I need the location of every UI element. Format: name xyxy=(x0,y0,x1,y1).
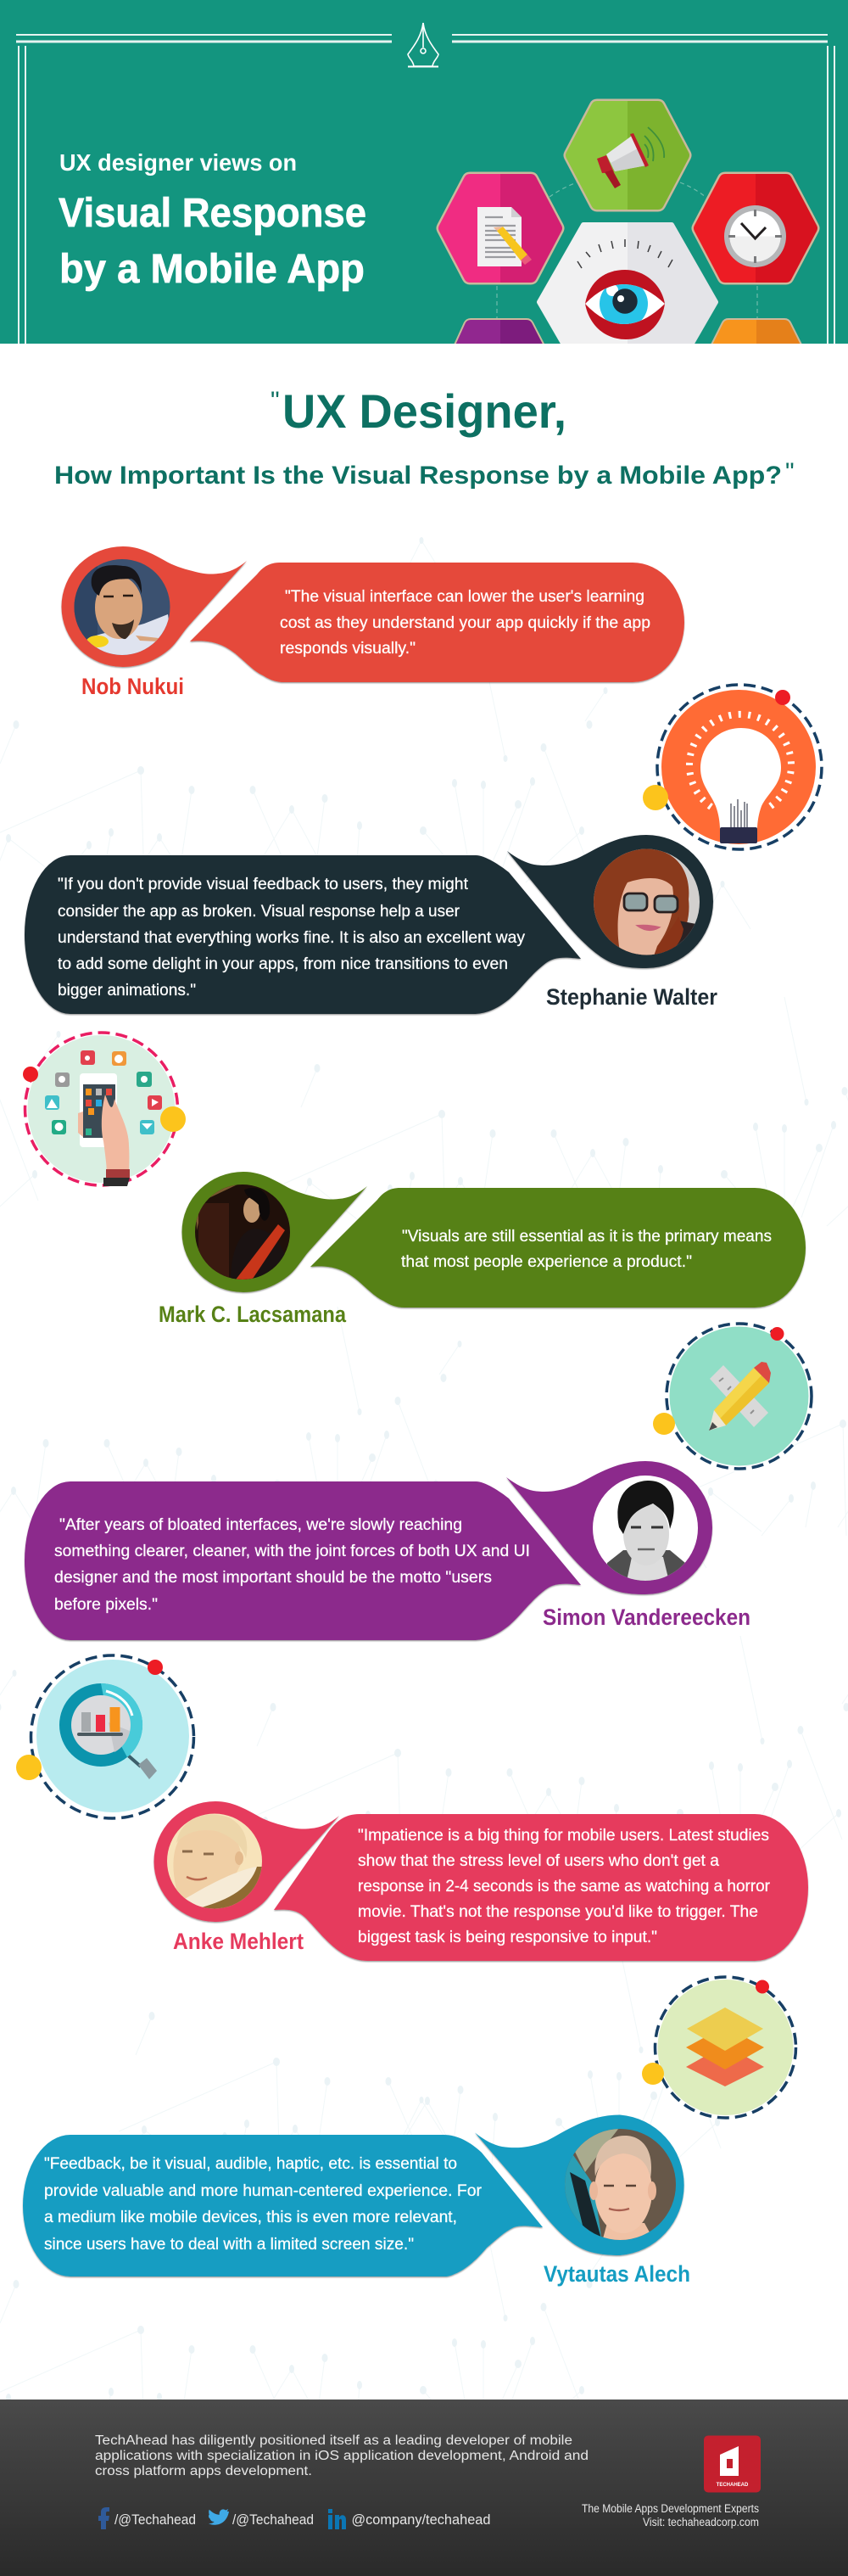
speech bubble: Nob Nukui: responds visually." xyxy=(280,640,416,658)
speech bubble: Stephanie Walter: "If you don't provide visual feedback to users, they might xyxy=(58,876,469,893)
social: linkedin xyxy=(328,2509,490,2529)
avatar: Nob Nukui xyxy=(61,546,247,667)
company description: applications with specialization in iOS application development, Android and xyxy=(95,2449,589,2463)
tagline and website: The Mobile Apps Development Experts xyxy=(582,2502,759,2515)
footer xyxy=(0,2400,848,2576)
speech bubble: Vytautas Alech: "Feedback, be it visual, audible, haptic, etc. is essential to xyxy=(44,2155,457,2173)
speech bubble: Anke Mehlert xyxy=(154,1801,808,1961)
speech bubble: Nob Nukui xyxy=(61,546,684,699)
quote: Nob Nukui xyxy=(190,563,684,682)
speech bubble: Mark C. Lacsamana: that most people experience a product." xyxy=(401,1253,692,1271)
company description xyxy=(95,2433,589,2478)
quote: Anke Mehlert xyxy=(274,1814,808,1961)
name: Simon Vandereecken: Simon Vandereecken xyxy=(543,1604,750,1630)
quote: Stephanie Walter xyxy=(25,855,581,1014)
speech bubble: Simon Vandereecken: before pixels." xyxy=(54,1596,158,1614)
hexagon: megaphone xyxy=(572,107,683,204)
speech bubble: Stephanie Walter: consider the app as broken. Visual response help a user xyxy=(58,903,460,921)
speech bubble: Anke Mehlert: biggest task is being responsive to input." xyxy=(358,1929,657,1946)
speech bubble: Mark C. Lacsamana: "Visuals are still essential as it is the primary means xyxy=(402,1228,772,1246)
social: linkedin: @company/techahead xyxy=(351,2512,490,2528)
hexagon: clock xyxy=(700,180,812,277)
icon: phone with app icons xyxy=(23,1033,186,1186)
speech bubble: Anke Mehlert: response in 2-4 seconds is the same as watching a horror xyxy=(358,1878,771,1896)
speech bubble: Nob Nukui: "The visual interface can lower the user's learning xyxy=(285,588,644,606)
social: facebook xyxy=(98,2507,196,2529)
avatar: Mark C. Lacsamana xyxy=(181,1172,367,1292)
speech bubble: Anke Mehlert: movie. That's not the response you'd like to trigger. The xyxy=(358,1903,758,1921)
hexagon icon cluster xyxy=(444,107,812,382)
speech bubble: Simon Vandereecken xyxy=(25,1461,750,1640)
company description: TechAhead has diligently positioned itself as a leading developer of mobile xyxy=(95,2433,572,2448)
avatar: Simon Vandereecken xyxy=(506,1461,712,1594)
speech bubble: Stephanie Walter: to add some delight in your apps, from nice transitions to even xyxy=(58,955,508,973)
speech bubble: Anke Mehlert: "Impatience is a big thing for mobile users. Latest studies xyxy=(358,1827,769,1845)
speech bubble: Vytautas Alech xyxy=(23,2114,690,2287)
social: facebook: /@Techahead xyxy=(114,2512,196,2528)
avatar: Stephanie Walter xyxy=(507,835,713,968)
speech bubble: Stephanie Walter: understand that everything works fine. It is also an excellent way xyxy=(58,929,525,947)
hexagon: orange partial xyxy=(711,318,802,344)
section heading xyxy=(54,384,795,490)
speech bubble: Mark C. Lacsamana xyxy=(159,1172,806,1327)
icon: light bulb xyxy=(643,685,822,849)
section heading: " xyxy=(785,458,795,486)
speech bubble: Vytautas Alech: since users have to deal with a limited screen size." xyxy=(44,2236,414,2254)
tagline and website: Visit: techaheadcorp.com xyxy=(643,2516,759,2528)
social: twitter: /@Techahead xyxy=(232,2512,314,2528)
heading line 1: " xyxy=(271,387,280,415)
avatar: Vytautas Alech xyxy=(475,2114,684,2255)
header title: Visual Response xyxy=(59,191,366,236)
speech bubble: Stephanie Walter: bigger animations." xyxy=(58,982,196,1000)
speech bubble: Anke Mehlert: show that the stress level of users who don't get a xyxy=(358,1852,719,1870)
company description: cross platform apps development. xyxy=(95,2464,312,2478)
speech bubble: Vytautas Alech: a medium like mobile devices, this is even more relevant, xyxy=(44,2209,457,2226)
speech bubble: Simon Vandereecken: "After years of bloated interfaces, we're slowly reaching xyxy=(59,1516,462,1534)
header title xyxy=(59,191,366,292)
header title: by a Mobile App xyxy=(59,247,365,292)
heading line 2: How Important Is the Visual Response by a Mobile App? xyxy=(54,462,782,490)
logo: TechAhead xyxy=(704,2435,761,2493)
quote: Mark C. Lacsamana xyxy=(310,1188,806,1308)
header banner xyxy=(0,0,848,382)
header kicker: UX designer views on xyxy=(59,149,297,176)
speech bubble: Vytautas Alech: provide valuable and more human-centered experience. For xyxy=(44,2182,483,2200)
icon: pencil and ruler xyxy=(653,1324,812,1469)
background network pattern xyxy=(0,537,848,2450)
hexagon: purple partial xyxy=(455,318,544,344)
name: Anke Mehlert: Anke Mehlert xyxy=(173,1929,304,1954)
name: Stephanie Walter: Stephanie Walter xyxy=(546,984,717,1010)
icon: pen nib xyxy=(408,23,438,66)
icon: stacked layers xyxy=(642,1977,795,2118)
logo: TechAhead: TECHAHEAD xyxy=(717,2483,749,2488)
speech bubble: Simon Vandereecken: something clearer, cleaner, with the joint forces of both UX and UI xyxy=(54,1543,530,1560)
hexagon: document xyxy=(444,180,556,277)
icon: magnifier with chart xyxy=(16,1655,193,1818)
hexagon: eye xyxy=(537,222,718,344)
name: Vytautas Alech: Vytautas Alech xyxy=(544,2261,690,2287)
speech bubble: Simon Vandereecken: designer and the most important should be the motto "users xyxy=(54,1569,492,1587)
section heading: UX Designer, xyxy=(282,384,566,438)
avatar: Anke Mehlert xyxy=(154,1801,339,1922)
quote: Simon Vandereecken xyxy=(25,1481,581,1640)
speech bubble: Stephanie Walter xyxy=(25,835,717,1014)
tagline and website xyxy=(582,2502,759,2528)
social: twitter xyxy=(209,2509,314,2528)
name: Nob Nukui: Nob Nukui xyxy=(81,674,184,699)
quote: Vytautas Alech xyxy=(23,2135,543,2276)
name: Mark C. Lacsamana: Mark C. Lacsamana xyxy=(159,1302,347,1327)
speech bubble: Nob Nukui: cost as they understand your app quickly if the app xyxy=(280,614,650,632)
